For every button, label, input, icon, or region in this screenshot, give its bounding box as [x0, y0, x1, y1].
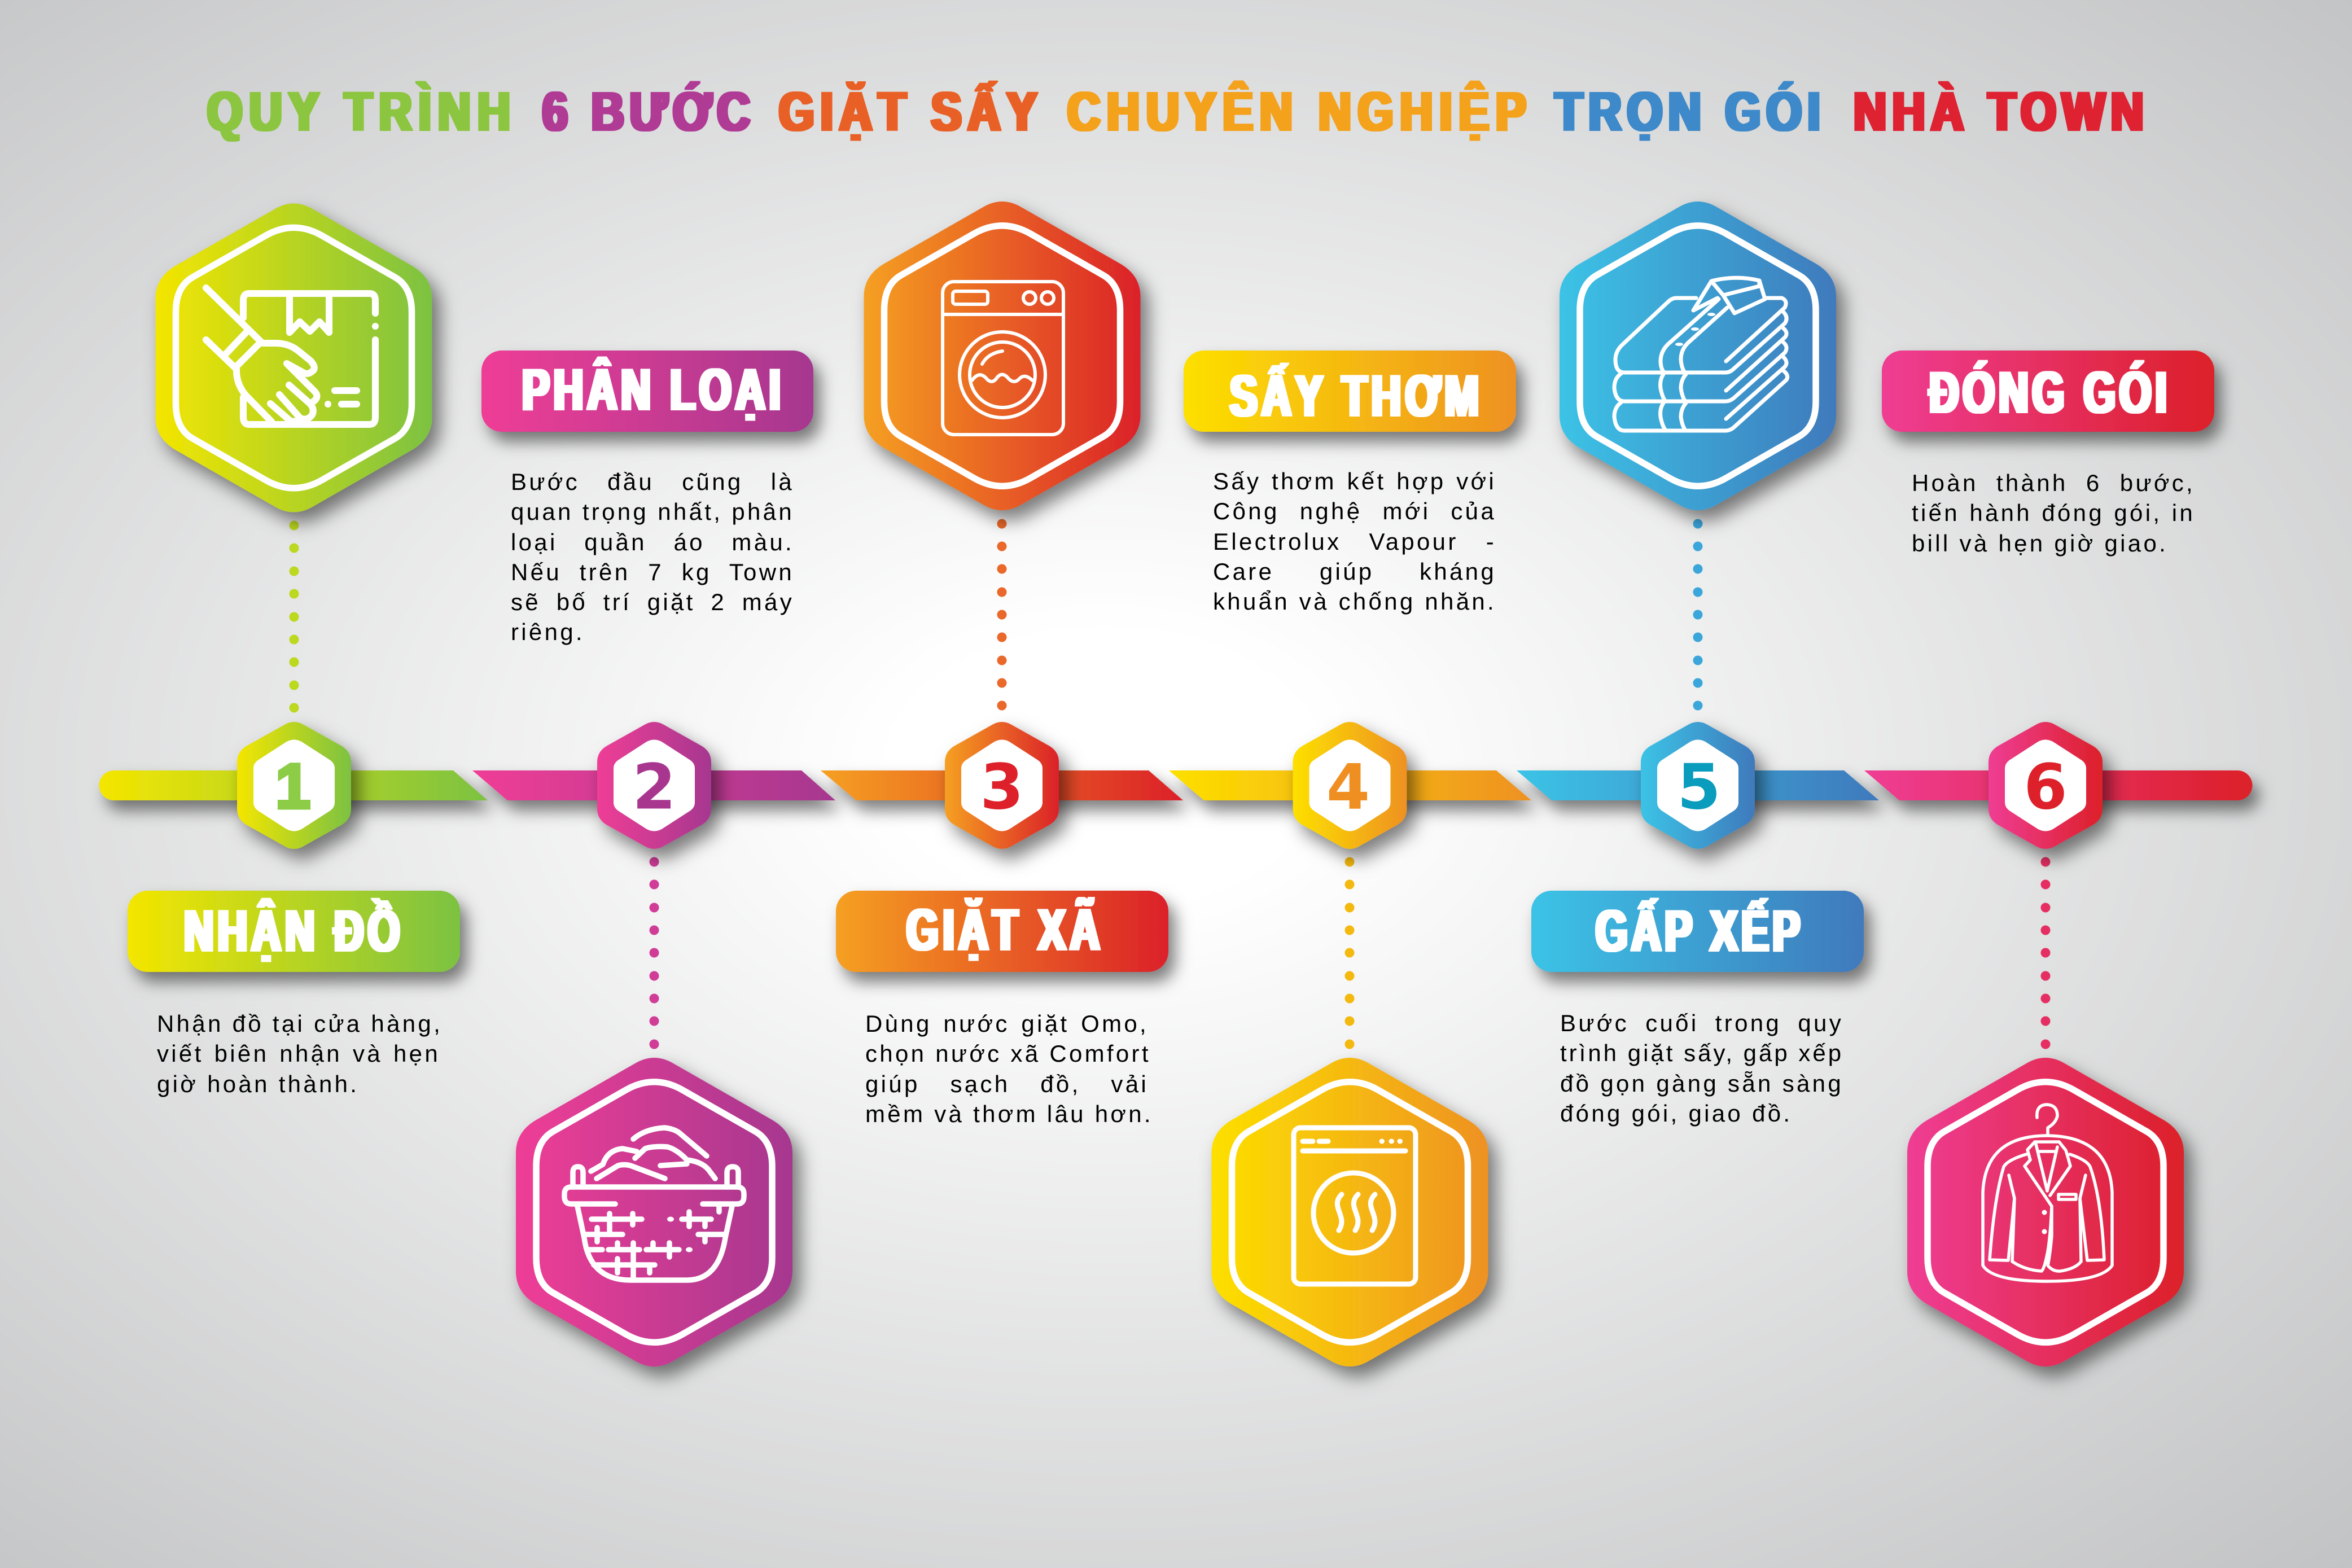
hexagon background [516, 1058, 792, 1366]
title: 6 BƯỚC: 6 BƯỚC [542, 81, 750, 142]
title: NHÀ TOWN: NHÀ TOWN [1854, 81, 2144, 142]
badge hexagon [1293, 722, 1407, 849]
title: TRỌN GÓI: TRỌN GÓI [1555, 81, 1820, 142]
description: đóng gói: tiến hành đóng gói, in [1912, 500, 2195, 526]
description: phân loại: quan trọng nhất, phân [511, 498, 794, 525]
badge white centre [253, 739, 335, 831]
heading text: ĐÓNG GÓI [1929, 360, 2167, 426]
description: gấp xếp [1560, 1010, 1843, 1127]
description: gấp xếp: Bước cuối trong quy [1560, 1010, 1843, 1036]
title [207, 81, 2144, 142]
badge hexagon [597, 722, 711, 849]
description: phân loại: Nếu trên 7 kg Town [511, 559, 794, 585]
badge white centre [1657, 739, 1738, 831]
description: nhận đồ: viết biên nhận và hẹn [157, 1040, 440, 1067]
description: gấp xếp: trình giặt sấy, gấp xếp [1560, 1040, 1843, 1066]
description: sấy thơm: Electrolux Vapour - [1213, 528, 1496, 555]
number badge 5 [1641, 722, 1755, 849]
number 6: 6 [2023, 751, 2068, 824]
dotted connector 1 [289, 520, 299, 712]
step 1 icon hexagon [156, 203, 432, 513]
dotted connector 6 [2041, 857, 2050, 1049]
heading pill: PHÂN LOẠI [481, 351, 813, 432]
step 2 icon hexagon [516, 1058, 792, 1366]
description: giặt xả [865, 1010, 1153, 1127]
dotted connector 4 [1344, 857, 1355, 1049]
heading pill: NHẬN ĐỒ [128, 891, 460, 972]
badge white centre [2005, 739, 2086, 831]
description: sấy thơm: Sấy thơm kết hợp với [1213, 468, 1496, 494]
badge hexagon [945, 722, 1059, 849]
bar segment 5 [1517, 770, 1879, 800]
description: sấy thơm: khuẩn và chống nhăn. [1213, 588, 1496, 615]
hexagon background [1560, 202, 1836, 510]
bar segment 4 [1169, 770, 1531, 800]
heading pill: GẤP XẾP [1531, 891, 1864, 972]
heading pill: ĐÓNG GÓI [1882, 351, 2214, 432]
heading text: GẤP XẾP [1596, 898, 1800, 964]
description: giặt xả: Dùng nước giặt Omo, [865, 1010, 1149, 1037]
description: gấp xếp: đóng gói, giao đồ. [1560, 1100, 1792, 1127]
icon: jacket on hanger [1983, 1105, 2112, 1281]
heading pill: SẤY THƠM [1184, 351, 1516, 432]
heading text: SẤY THƠM [1230, 363, 1479, 429]
description: phân loại: Bước đầu cũng là [511, 468, 794, 495]
icon: box and hand [206, 288, 379, 424]
description: đóng gói: bill và hẹn giờ giao. [1912, 530, 2168, 557]
bar segment 1 [99, 770, 488, 800]
description: phân loại: sẽ bố trí giặt 2 máy [511, 589, 794, 615]
description: sấy thơm [1213, 468, 1496, 615]
number badge 4 [1293, 722, 1407, 849]
hexagon outline [536, 1082, 772, 1342]
hexagon background [864, 202, 1140, 510]
hexagon background [1211, 1058, 1488, 1366]
title: QUY TRÌNH: QUY TRÌNH [207, 81, 510, 142]
description: đóng gói: Hoàn thành 6 bước, [1912, 470, 2195, 496]
dotted connector 5 [1693, 519, 1702, 710]
badge hexagon [1641, 722, 1755, 849]
description: giặt xả: giúp sạch đồ, vải [865, 1071, 1149, 1097]
number badge 1 [237, 722, 351, 849]
description: giặt xả: chọn nước xã Comfort [865, 1040, 1151, 1067]
hexagon background [1907, 1058, 2184, 1366]
number badge 6 [1989, 722, 2103, 849]
title: CHUYÊN NGHIỆP: CHUYÊN NGHIỆP [1067, 81, 1526, 142]
description: nhận đồ: Nhận đồ tại cửa hàng, [157, 1010, 443, 1037]
heading text: GIẶT XÃ [906, 897, 1100, 963]
icon: washing machine [943, 282, 1063, 435]
bar segment 6 [1864, 770, 2253, 800]
icon: dryer [1294, 1128, 1416, 1284]
number 3: 3 [980, 751, 1024, 824]
icon: laundry basket [564, 1128, 744, 1280]
heading pill: GIẶT XÃ [836, 891, 1168, 972]
description: phân loại [511, 468, 794, 645]
bar segment 3 [821, 770, 1183, 800]
description: giặt xả: mềm và thơm lâu hơn. [865, 1101, 1153, 1127]
hexagon outline [1928, 1082, 2163, 1342]
description: nhận đồ [157, 1010, 443, 1097]
hexagon outline [1232, 1082, 1468, 1342]
hexagon background [156, 203, 432, 513]
hexagon outline [884, 226, 1120, 486]
badge white centre [961, 739, 1043, 831]
dotted connector 3 [997, 519, 1007, 710]
step 4 icon hexagon [1211, 1058, 1488, 1366]
timeline bar [99, 770, 2253, 800]
hexagon outline [176, 227, 412, 488]
number badge 3 [945, 722, 1059, 849]
dotted connector 2 [649, 857, 659, 1049]
badge white centre [614, 739, 695, 831]
number 4: 4 [1326, 751, 1370, 824]
step 3 icon hexagon [864, 202, 1140, 510]
badge hexagon [237, 722, 351, 849]
description: phân loại: riêng. [511, 619, 585, 645]
description: phân loại: loại quần áo màu. [511, 529, 794, 555]
step 6 icon hexagon [1907, 1058, 2184, 1366]
description: sấy thơm: Care giúp kháng [1213, 558, 1496, 585]
badge white centre [1309, 739, 1391, 831]
bar segment 2 [472, 770, 835, 800]
description: sấy thơm: Công nghệ mới của [1213, 498, 1496, 524]
badge hexagon [1989, 722, 2103, 849]
number badge 2 [597, 722, 711, 849]
description: nhận đồ: giờ hoàn thành. [157, 1071, 359, 1097]
heading text: NHẬN ĐỒ [184, 899, 400, 964]
step 5 icon hexagon [1560, 202, 1836, 510]
hexagon outline [1580, 226, 1816, 486]
number 5: 5 [1677, 751, 1721, 824]
description: gấp xếp: đồ gọn gàng sẵn sàng [1560, 1070, 1843, 1097]
icon: folded shirts [1614, 278, 1788, 431]
description: đóng gói [1912, 470, 2195, 557]
title: GIẶT SẤY: GIẶT SẤY [779, 81, 1037, 142]
number 2: 2 [632, 751, 676, 824]
number 1: 1 [275, 751, 310, 822]
heading text: PHÂN LOẠI [522, 357, 781, 423]
